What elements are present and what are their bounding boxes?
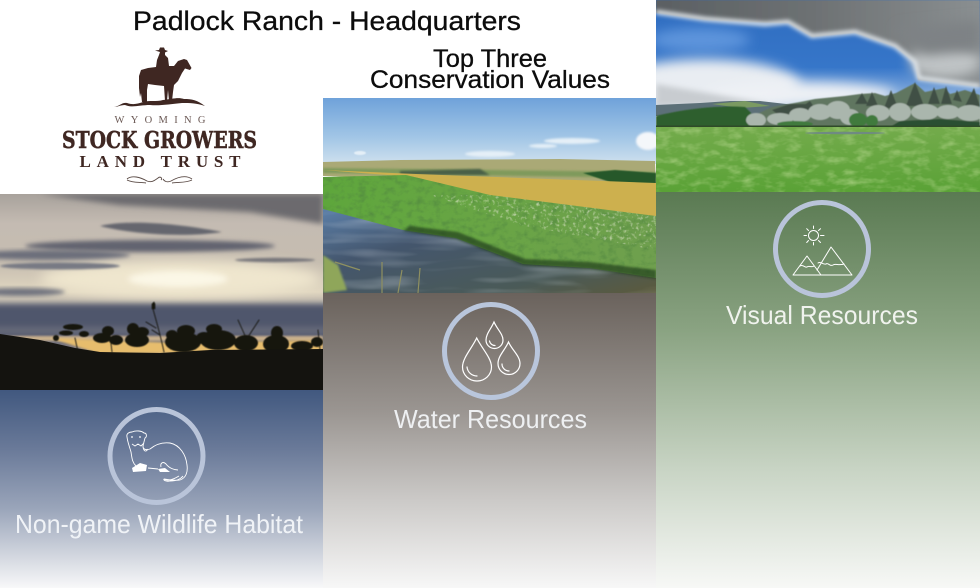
wheat field bbox=[324, 170, 656, 216]
photo: sunset with bird on tree bbox=[0, 194, 343, 390]
icon: sun and mountains in circle bbox=[776, 202, 868, 296]
tree line bbox=[656, 82, 980, 127]
storm cloud bbox=[656, 0, 980, 87]
logo text: Land Trust: LAND TRUST bbox=[80, 152, 241, 171]
photo: stream and meadow bbox=[323, 98, 660, 293]
logo text: Stock Growers: STOCK GROWERS bbox=[62, 127, 257, 154]
distant ridge bbox=[656, 101, 795, 116]
logo text: Wyoming: WYOMING bbox=[114, 115, 206, 126]
heading: top three conservation values bbox=[370, 45, 610, 94]
bird and tree silhouettes bbox=[53, 302, 323, 353]
panel: water resources background bbox=[323, 293, 656, 588]
logo: Wyoming Stock Growers Land Trust bbox=[62, 48, 257, 183]
foreground reeds bbox=[323, 255, 347, 293]
stream bbox=[323, 205, 656, 293]
photo: green field, trees and storm clouds bbox=[656, 0, 980, 192]
title: Padlock Ranch - Headquarters bbox=[133, 6, 521, 36]
grassy bank bbox=[323, 175, 656, 278]
heading: top three conservation values: Conservation Values bbox=[370, 66, 610, 94]
label: water resources: Water Resources bbox=[394, 404, 587, 434]
icon: rider on horse bbox=[114, 48, 205, 107]
label: non-game wildlife habitat: Non-game Wildlife Habitat bbox=[15, 509, 304, 539]
heading: top three conservation values: Top Three bbox=[433, 45, 547, 73]
distant hills bbox=[323, 159, 656, 185]
icon: otter in circle bbox=[110, 410, 203, 502]
icon: water drops in circle bbox=[444, 304, 538, 398]
field bbox=[656, 126, 980, 192]
panel: visual resources background bbox=[656, 192, 980, 588]
panel: non-game wildlife habitat background bbox=[0, 390, 323, 588]
label: visual resources: Visual Resources bbox=[726, 300, 918, 330]
logo ornament bbox=[127, 177, 192, 183]
dark bank edge bbox=[403, 226, 656, 279]
dark hillside bbox=[0, 334, 323, 390]
